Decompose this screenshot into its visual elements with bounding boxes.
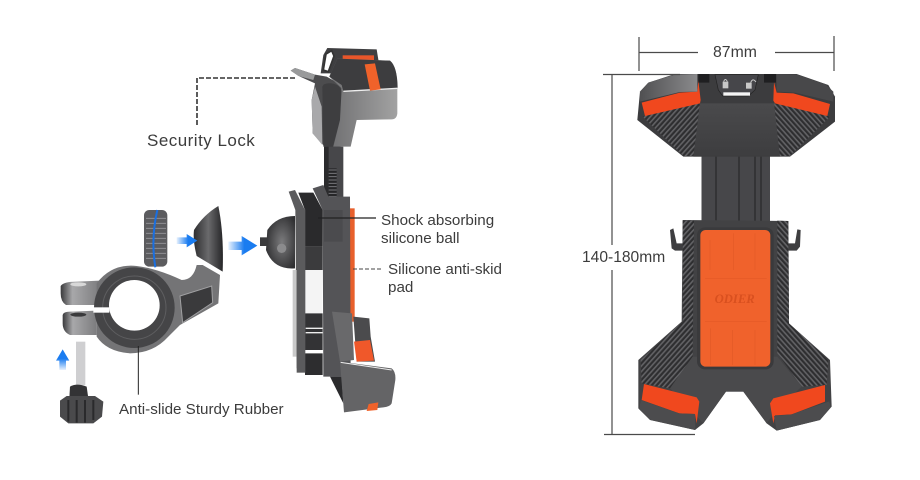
blue rotate arrow <box>153 210 157 267</box>
knurled knob <box>144 210 167 267</box>
dimension: height 140-180mm <box>582 74 695 434</box>
suction cup <box>194 206 223 272</box>
dimension: width 87mm <box>639 36 834 71</box>
label: pad leader <box>353 268 383 270</box>
dimension: width 87mm: 87mm <box>713 44 757 61</box>
orange silicone pad <box>697 227 774 369</box>
label: shock absorbing silicone ball: Shock absorbing <box>381 212 494 229</box>
label: silicone anti-skid pad: pad <box>388 279 413 296</box>
clamp upper ear <box>61 281 100 305</box>
top jaw <box>637 74 835 157</box>
label: security lock leader <box>197 78 296 125</box>
blue arrow to ball <box>228 236 257 255</box>
rubber sleeve <box>94 267 175 348</box>
center sliding column <box>702 150 770 230</box>
top clamp <box>291 48 398 207</box>
clamp lower ear <box>63 311 97 335</box>
handlebar clamp assembly <box>56 206 257 423</box>
label: silicone anti-skid pad: Silicone anti-skid <box>388 261 502 278</box>
clamp arm <box>97 265 220 353</box>
blue arrow up <box>56 349 69 370</box>
label: shock absorbing silicone ball: silicone ball <box>381 230 460 247</box>
holder: side view <box>260 48 398 412</box>
label: anti-slide sturdy rubber: Anti-slide Sturdy Rubber <box>119 401 284 418</box>
logo: ODIER <box>715 292 755 306</box>
dimension: height 140-180mm: 140-180mm <box>582 249 665 266</box>
screw <box>76 342 85 385</box>
holder: front view <box>637 74 835 431</box>
rubber leader line <box>137 346 140 395</box>
label: shock ball leader <box>318 217 376 219</box>
orange foot pads <box>642 384 699 423</box>
label: security lock: Security Lock <box>147 131 255 150</box>
blue arrow right <box>177 234 197 247</box>
bottom body <box>638 220 832 431</box>
thumb screw <box>69 385 88 398</box>
mount body and silicone pad <box>260 185 395 412</box>
